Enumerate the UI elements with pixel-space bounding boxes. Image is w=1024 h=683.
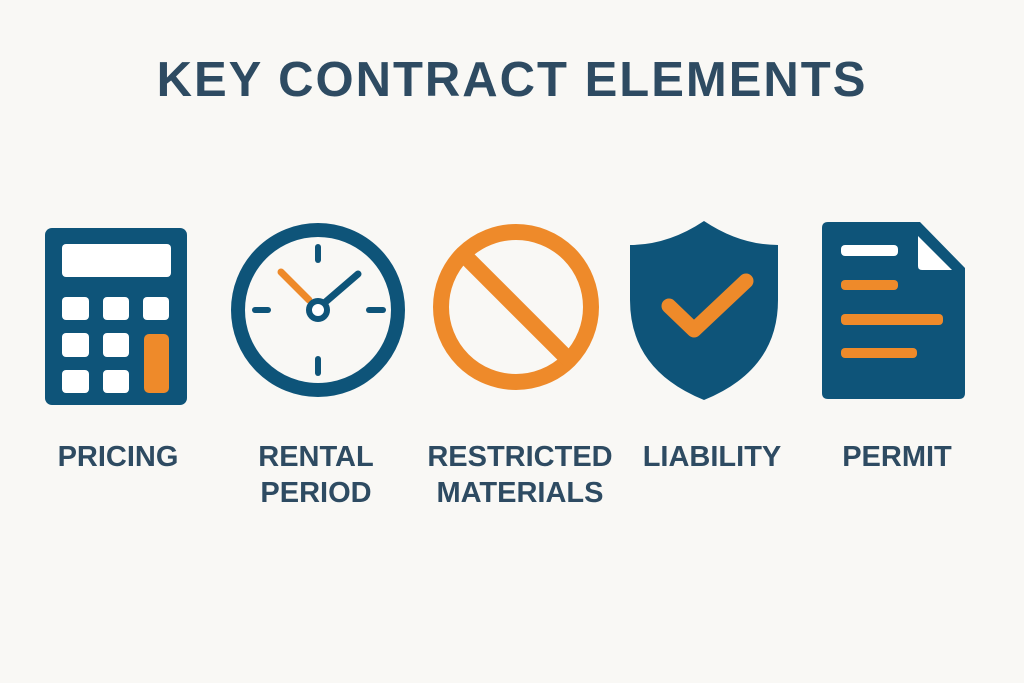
label: rental period: PERIOD — [260, 477, 372, 509]
label: restricted materials: MATERIALS — [436, 477, 604, 509]
label: rental period — [258, 441, 374, 509]
label: rental period: RENTAL — [258, 441, 374, 473]
label: restricted materials — [427, 441, 613, 509]
icon: clock — [238, 230, 398, 390]
label: permit: PERMIT — [842, 441, 952, 473]
label: liability: LIABILITY — [643, 441, 781, 473]
icon: prohibited — [441, 232, 591, 382]
label: pricing: PRICING — [58, 441, 178, 473]
label: restricted materials: RESTRICTED — [427, 441, 613, 473]
icon: calculator — [45, 228, 187, 405]
icon: document — [822, 222, 965, 399]
title: KEY CONTRACT ELEMENTS — [157, 53, 867, 107]
icon: shield with check — [630, 221, 778, 400]
